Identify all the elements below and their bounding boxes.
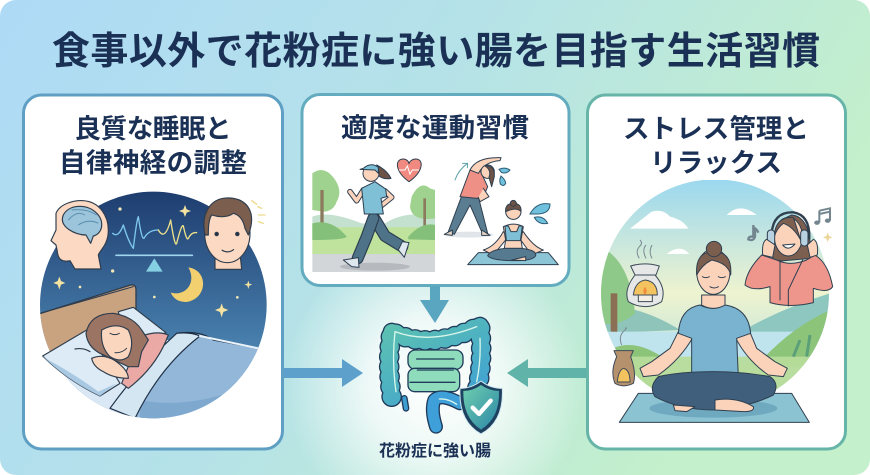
rectum <box>433 397 460 427</box>
icon: crescent moon and stars <box>53 205 252 317</box>
panel: stress management <box>588 95 846 449</box>
large intestine <box>389 326 481 408</box>
label: gut: 花粉症に強い腸 <box>379 441 491 460</box>
small intestine <box>408 350 463 392</box>
title: 食事以外で花粉症に強い腸を目指す生活習慣 <box>52 31 820 73</box>
icon: brain and head <box>51 201 108 269</box>
arrow: from exercise to gut <box>420 286 449 323</box>
heading: sleep: 自律神経の調整 <box>59 148 247 178</box>
icon: small diffuser <box>613 328 635 386</box>
arrow: from stress relief to gut <box>507 359 587 387</box>
illustration: woman with headphones <box>745 212 833 306</box>
heading: sleep <box>59 114 247 178</box>
arrow: from sleep to gut <box>283 359 363 387</box>
brain wave and balance <box>113 217 197 272</box>
heading: stress: リラックス <box>650 148 782 178</box>
illustration: stretching <box>443 158 501 238</box>
illustration: lake landscape <box>601 180 829 390</box>
illustration: yoga pose <box>468 200 558 265</box>
icon: smiling man <box>204 198 265 269</box>
icon: healthy gut <box>389 326 502 434</box>
icon: music notes <box>748 208 832 242</box>
icon: aroma diffuser <box>627 240 663 307</box>
icon: sweat drops <box>499 168 550 224</box>
panel: sleep and autonomic nerves <box>24 95 282 449</box>
sleeping woman <box>75 313 168 388</box>
heading: stress: ストレス管理と <box>623 114 809 144</box>
icon: heart <box>397 159 421 182</box>
heading: exercise: 適度な運動習慣 <box>341 113 529 143</box>
heading: stress <box>623 114 809 178</box>
bed and bedding <box>40 284 258 418</box>
icon: shield with check <box>460 381 502 434</box>
jogger <box>343 165 409 267</box>
pillow <box>43 307 166 396</box>
heading: sleep: 良質な睡眠と <box>74 114 232 144</box>
illustration: park jogging <box>312 165 435 272</box>
panel: exercise <box>302 94 569 286</box>
illustration: sleep scene <box>33 192 267 430</box>
illustration: meditating woman <box>619 241 809 422</box>
